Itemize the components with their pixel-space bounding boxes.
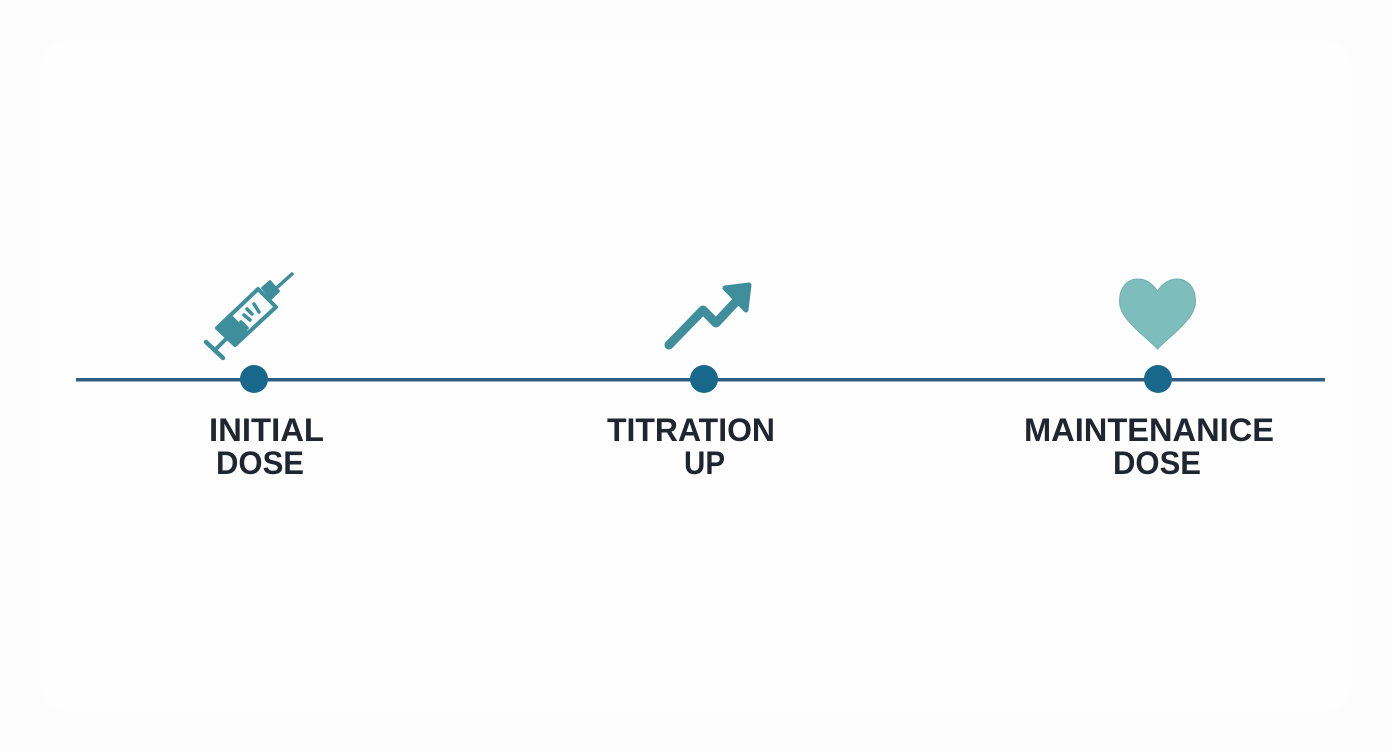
step: initial dose (206, 274, 324, 481)
icon: syringe (206, 274, 292, 358)
step: maintenance dose (1024, 279, 1274, 481)
icon: rising arrow (669, 285, 749, 345)
label: titration up: UP (684, 445, 725, 481)
timeline marker: initial dose (240, 365, 268, 393)
label: maintenance dose: MAINTENANICE (1024, 412, 1274, 448)
icon: heart (1120, 279, 1196, 349)
label: maintenance dose: DOSE (1113, 445, 1201, 481)
timeline marker: maintenance dose (1144, 365, 1172, 393)
label: maintenance dose (1024, 412, 1274, 481)
label: initial dose: DOSE (216, 445, 304, 481)
step: titration up (607, 285, 775, 481)
timeline marker: titration up (690, 365, 718, 393)
label: titration up (607, 412, 775, 481)
label: titration up: TITRATION (607, 412, 775, 448)
label: initial dose (209, 412, 324, 481)
label: initial dose: INITIAL (209, 412, 324, 448)
timeline line (76, 378, 1325, 382)
